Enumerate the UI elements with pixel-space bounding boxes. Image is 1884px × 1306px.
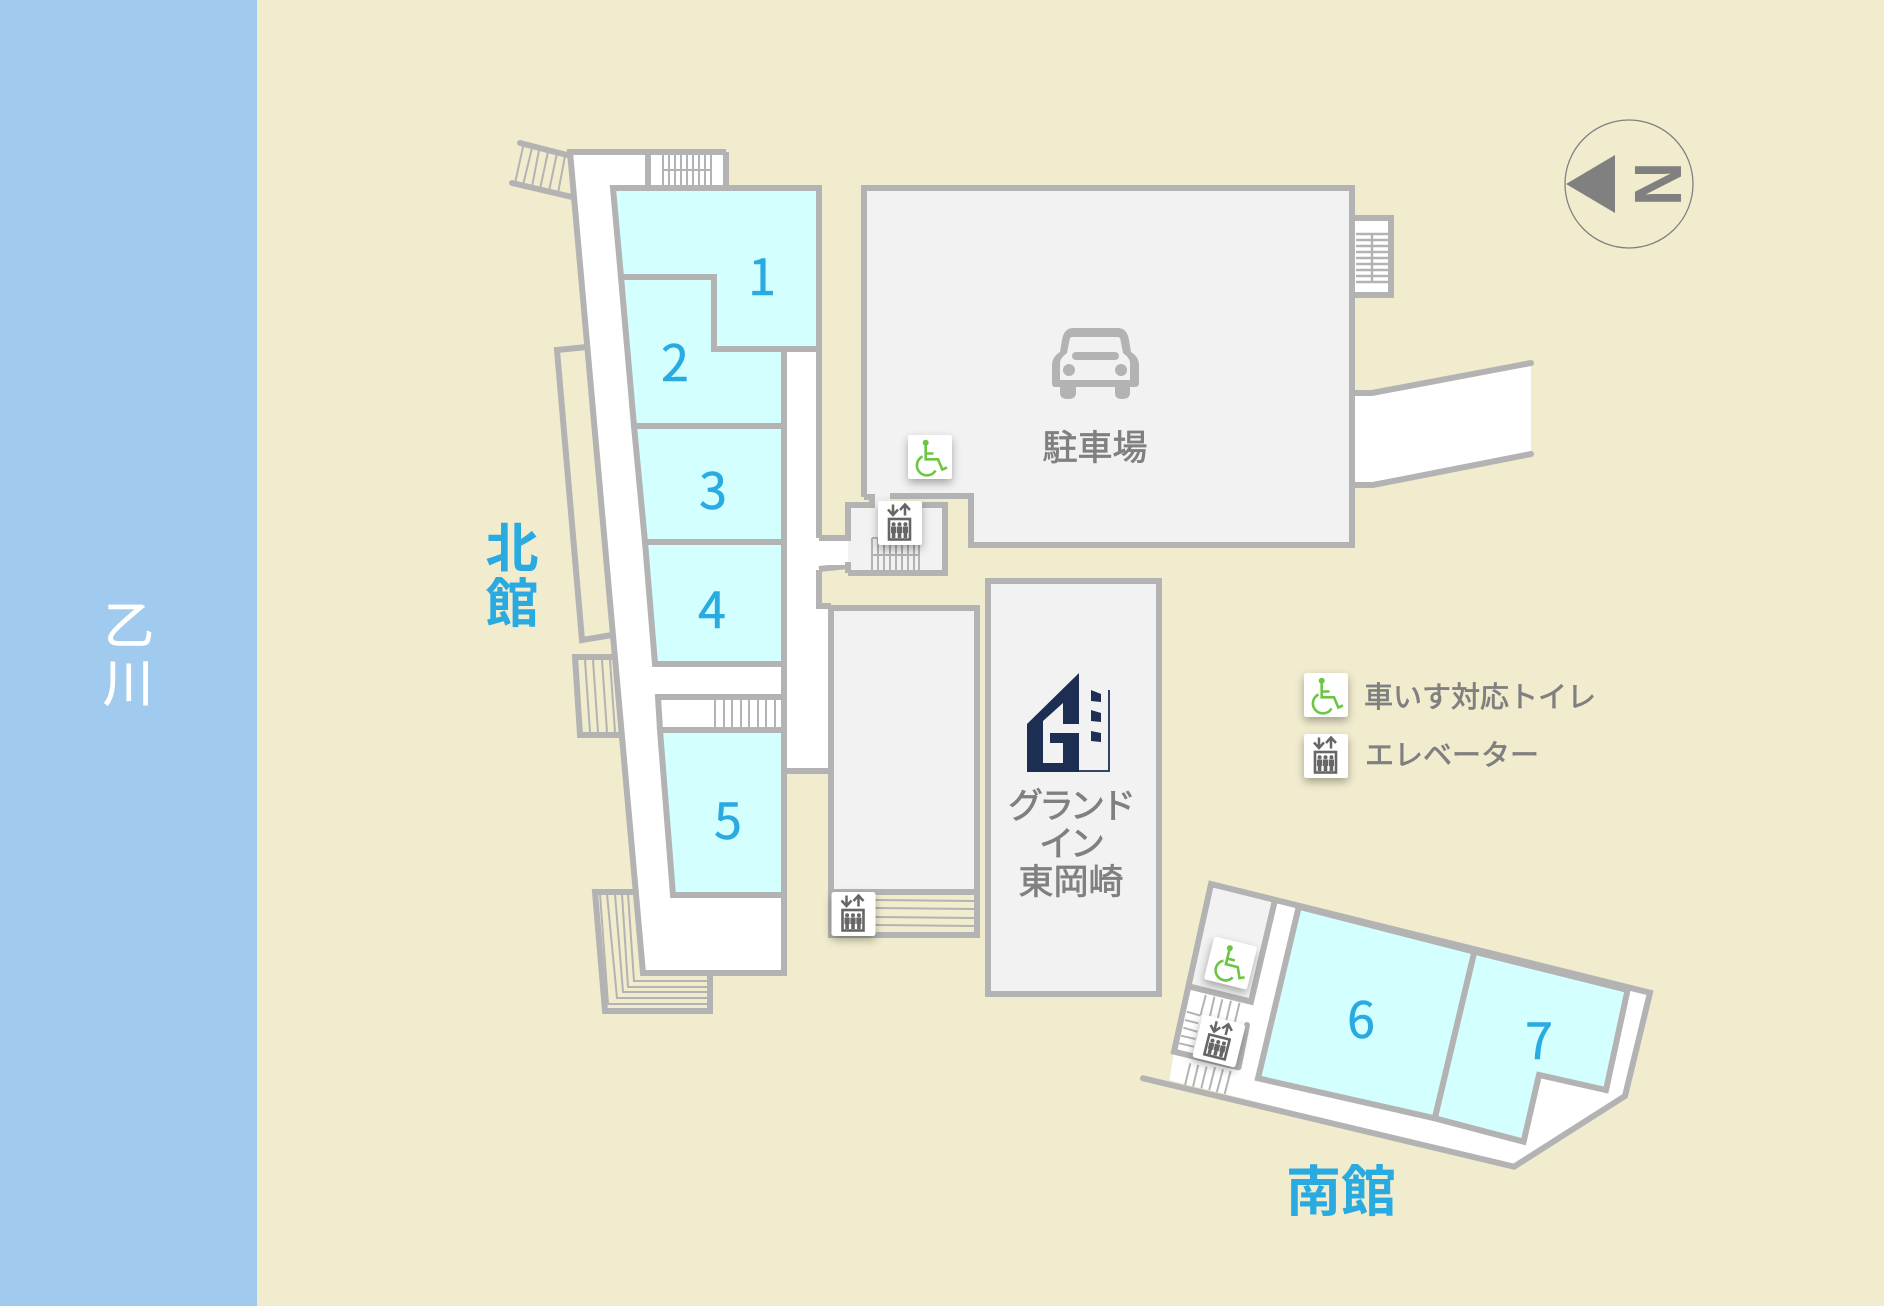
panel: annex (831, 608, 977, 936)
shop numbers 6-7: 7 (1525, 1002, 1553, 1074)
hotel name: 東岡崎 (1018, 863, 1124, 902)
hotel logo (1027, 673, 1109, 772)
label: parking 駐車場: 駐車場 (1042, 429, 1148, 468)
north building floor and corridors (570, 152, 848, 973)
shop numbers 1-5: 3 (699, 452, 727, 524)
southwest staircase (595, 892, 710, 1011)
shop numbers 1-5: 5 (714, 782, 742, 854)
parking ramp (1352, 363, 1531, 485)
parking floor (864, 188, 1352, 545)
legend text: elevator: エレベーター (1365, 740, 1539, 772)
river label: 乙川: 乙 (104, 598, 154, 654)
river label: 乙川 (103, 598, 154, 712)
panel: north building (486, 143, 848, 1011)
shop numbers 6-7: 6 (1347, 981, 1375, 1053)
compass: north points left (1565, 120, 1696, 248)
legend (1304, 673, 1596, 778)
hotel name: イン (1039, 825, 1103, 864)
shop numbers 6-7 (1347, 981, 1553, 1074)
hotel name: グランド (1008, 787, 1132, 826)
icon: elevator south (1192, 1014, 1246, 1068)
icon: wheelchair toilet south (1204, 936, 1257, 990)
river band (0, 0, 257, 1306)
stair room above shop 5 (658, 697, 784, 730)
building walls (570, 152, 848, 973)
shop numbers 1-5: 4 (698, 571, 726, 643)
west staircase (575, 657, 620, 735)
panel: south building (1143, 884, 1650, 1223)
shop 7 (1435, 952, 1628, 1142)
compass: north points left: N (1620, 162, 1696, 206)
annex floor (831, 608, 977, 892)
shop 6 (1258, 907, 1474, 1118)
shop 1 (613, 188, 819, 349)
panel: parking (819, 188, 1531, 573)
south building floor (1170, 884, 1650, 1167)
label: north building 北館 (486, 520, 538, 634)
panel: Grand Inn hotel (988, 581, 1159, 994)
south walls (1143, 884, 1650, 1167)
shop 5 (660, 730, 784, 895)
shop 2 (621, 277, 784, 426)
river label: 乙川: 川 (103, 656, 153, 712)
west terrace (557, 347, 612, 640)
shop numbers 1-5 (661, 238, 776, 854)
shop 4 (645, 542, 784, 664)
icon: wheelchair toilet in parking (908, 435, 952, 479)
parking staircase (1352, 218, 1391, 295)
icon: elevator at annex (832, 892, 876, 936)
legend icon: elevator (1304, 734, 1348, 778)
south staircase lines (1179, 995, 1240, 1094)
hotel building (988, 581, 1159, 994)
toilet room (1190, 884, 1275, 1002)
legend text: accessible toilet: 車いす対応トイレ (1364, 681, 1596, 714)
parking walls (864, 188, 1352, 545)
top-left staircase (512, 143, 572, 197)
legend icon: wheelchair (1304, 673, 1348, 717)
shop numbers 1-5: 2 (661, 324, 689, 396)
icon: car (1052, 328, 1139, 399)
label: south building 南館: 南館 (1286, 1161, 1396, 1223)
hotel name (1008, 787, 1132, 902)
top staircase (648, 152, 726, 188)
label: north building 北館: 館 (486, 575, 538, 634)
annex staircase (831, 892, 977, 935)
shop numbers 1-5: 1 (748, 238, 776, 310)
label: north building 北館: 北 (486, 520, 538, 579)
elevator lobby (819, 497, 945, 573)
shop 3 (634, 426, 784, 542)
icon: elevator in lobby (878, 501, 922, 545)
